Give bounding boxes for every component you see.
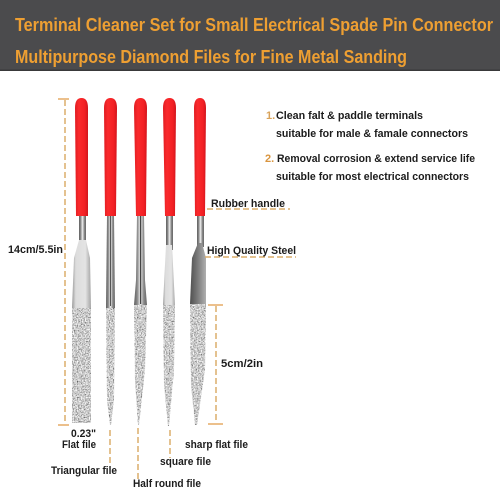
- feature 2: suitable for most electrical connectors: [276, 171, 469, 183]
- label: width and flat file: 0.23": [71, 428, 96, 440]
- dimension: diamond length: 5cm/2in: [221, 358, 263, 370]
- headline line 2: Multipurpose Diamond Files for Fine Metal Sanding: [15, 47, 407, 67]
- feature list: [265, 110, 475, 183]
- feature 2: Removal corrosion & extend service life: [277, 153, 475, 165]
- label: half round file: Half round file: [133, 478, 201, 490]
- label: triangular file: [51, 430, 117, 477]
- feature 2: 2.: [265, 153, 274, 165]
- feature 1: [266, 110, 468, 140]
- dimension: total length: [8, 99, 69, 425]
- feature 2: [265, 153, 475, 183]
- callout: steel: High Quality Steel: [207, 245, 296, 257]
- feature 1: Clean falt & paddle terminals: [276, 110, 423, 122]
- file: flat: [72, 98, 91, 423]
- file: half round: [134, 98, 147, 425]
- label: sharp flat file: sharp flat file: [185, 439, 248, 451]
- label: square file: square file: [160, 456, 211, 468]
- dimension: diamond length: [208, 305, 263, 424]
- file: sharp flat: [190, 98, 206, 425]
- label: width and flat file: [62, 428, 96, 451]
- callout: rubber handle: Rubber handle: [211, 198, 285, 210]
- header banner: [0, 0, 500, 71]
- dimension: total length: 14cm/5.5in: [8, 244, 63, 256]
- file: square: [163, 98, 176, 426]
- label: half round file: [133, 428, 201, 490]
- label: width and flat file: Flat file: [62, 439, 96, 451]
- label: square file: [160, 430, 211, 468]
- label: triangular file: Triangular file: [51, 465, 117, 477]
- feature 1: 1.: [266, 110, 275, 122]
- feature 1: suitable for male & famale connectors: [276, 128, 468, 140]
- file: triangular: [104, 98, 117, 425]
